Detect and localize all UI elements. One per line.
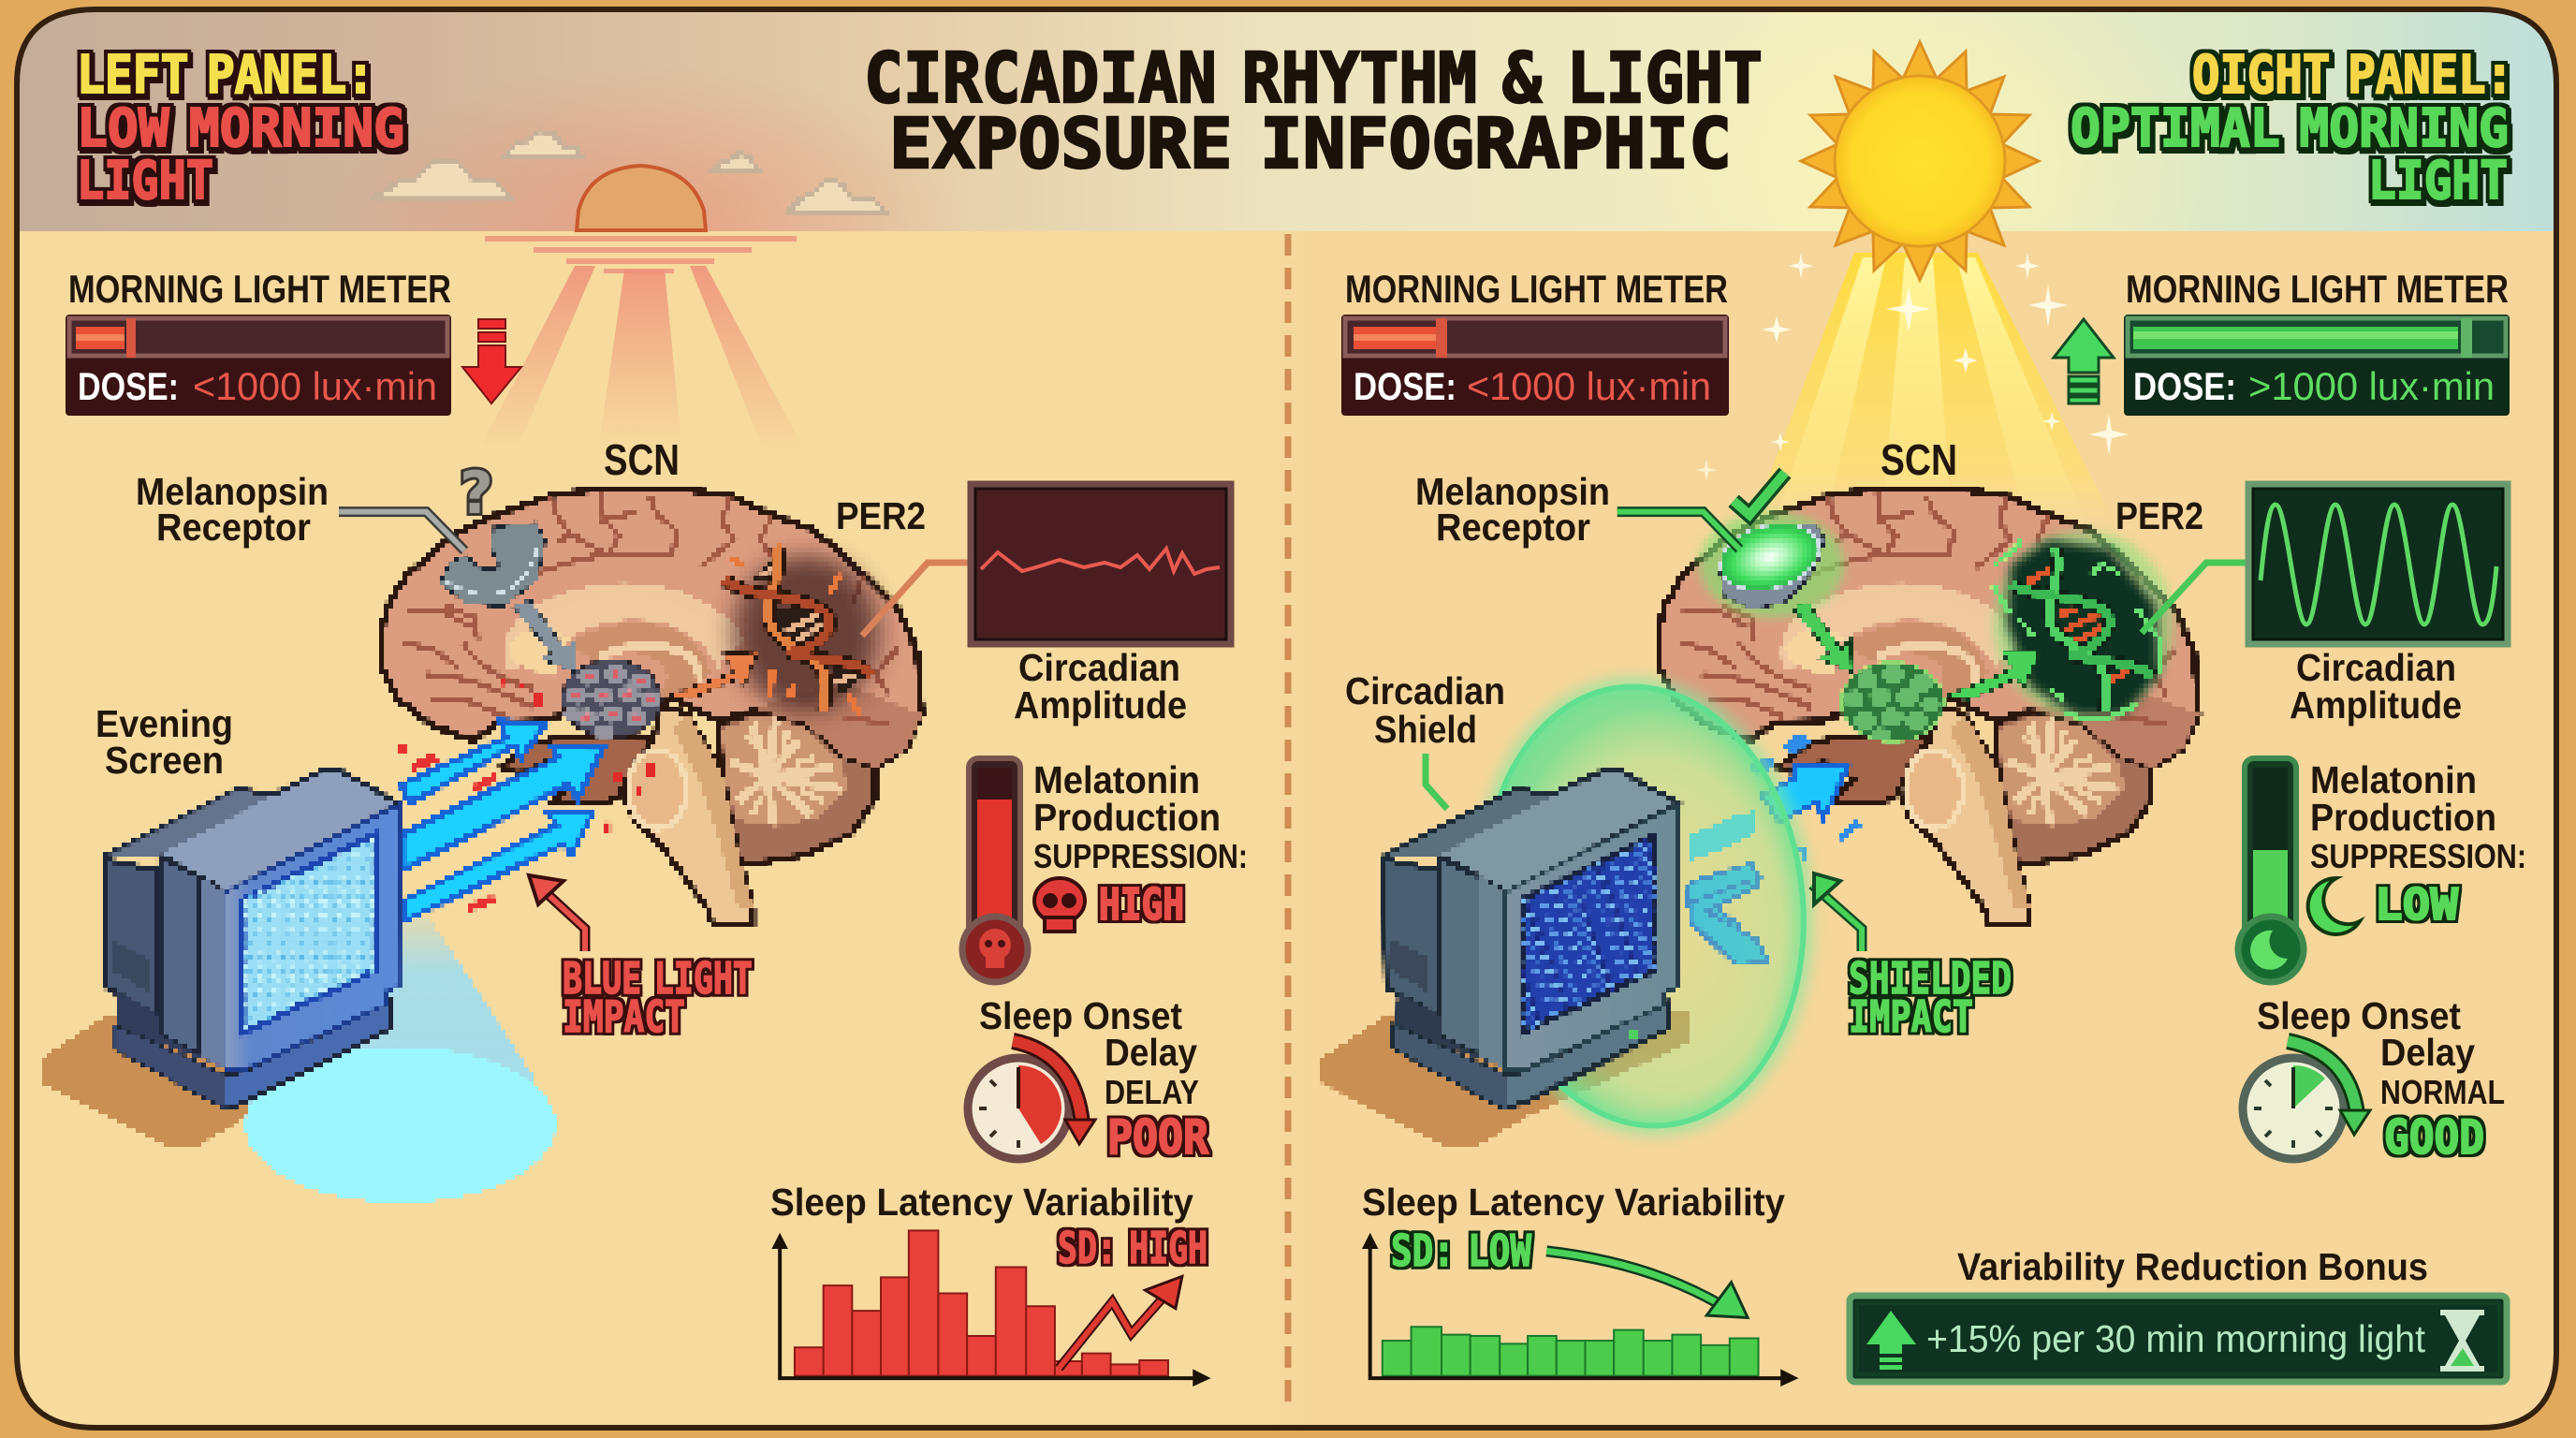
CRT monitor — [105, 770, 399, 1109]
falling trend arrow — [1546, 1251, 1748, 1317]
connector to amplitude scope right — [2142, 563, 2247, 633]
histogram right — [1362, 1233, 1798, 1387]
HIGH status: HIGH — [1099, 879, 1184, 930]
SCN label left: SCN — [604, 435, 680, 484]
axis arrowheads — [771, 1233, 1211, 1387]
circadian shield — [1462, 671, 1825, 1141]
shield pointer — [1426, 754, 1447, 809]
left light meter: DOSE: — [78, 364, 179, 408]
Circadian Amplitude label left — [1014, 646, 1187, 726]
shielded impact label — [1849, 953, 2012, 1042]
Sleep Latency Variability title right: Sleep Latency Variability — [1362, 1181, 1785, 1224]
PER2 label right: PER2 — [2115, 494, 2203, 537]
Melatonin Production text right: Production — [2310, 796, 2496, 839]
glowing PER2 zone — [1994, 531, 2173, 717]
shielded impact pointer — [1812, 873, 1862, 951]
red damage marks — [499, 679, 655, 832]
heading: right panel — [2071, 45, 2513, 212]
POOR status: POOR — [1107, 1110, 1209, 1165]
heading: left panel: LOW MORNING — [77, 98, 404, 159]
desk shadow — [41, 917, 556, 1202]
Variability Reduction Bonus title: Variability Reduction Bonus — [1957, 1245, 2428, 1288]
left meter label: MORNING LIGHT METER — [68, 267, 451, 311]
Melatonin Production text right: SUPPRESSION: — [2310, 837, 2526, 875]
PER2 DNA damaged — [724, 546, 871, 714]
melatonin thermometer left — [962, 758, 1028, 982]
panel divider — [1284, 234, 1292, 1404]
left light meter — [66, 315, 451, 416]
Melanopsin Receptor label left: Melanopsin — [136, 470, 329, 513]
monitor and shield, right — [1321, 671, 1862, 1147]
Sleep Onset Delay text left: Delay — [1105, 1031, 1197, 1074]
heading: right panel: LIGHT — [2368, 151, 2508, 212]
melanopsin receptor dish, broken — [441, 522, 546, 607]
SCN label right: SCN — [1881, 435, 1957, 484]
Melatonin Production text left: Production — [1033, 796, 1221, 839]
dark PER2 zone — [734, 555, 879, 712]
receptor glow — [1699, 512, 1845, 618]
Evening Screen label: Screen — [105, 739, 224, 782]
clouds — [377, 131, 886, 213]
PER2 label left: PER2 — [836, 494, 926, 537]
Melatonin Production text right: Melatonin — [2310, 758, 2477, 801]
blue light impact pointer — [529, 875, 585, 951]
right panel low light meter: <1000 lux·min — [1467, 364, 1711, 408]
Evening Screen label: Evening — [95, 702, 233, 745]
icon: low dose down arrow — [462, 319, 521, 404]
right panel low light meter — [1341, 315, 1729, 416]
light cone — [246, 917, 537, 1136]
circadian amplitude scope right — [2248, 484, 2508, 644]
heading: left panel: LEFT PANEL: — [77, 45, 374, 106]
blue light impact label: IMPACT — [563, 991, 685, 1042]
melanopsin pointer left — [339, 512, 464, 550]
SD HIGH status: SD: HIGH — [1058, 1223, 1208, 1273]
CRT monitor right — [1384, 770, 1678, 1109]
shielded impact label: IMPACT — [1849, 991, 1973, 1042]
Circadian Shield label: Circadian — [1345, 669, 1505, 712]
Melanopsin Receptor label right: Melanopsin — [1415, 470, 1610, 513]
melanopsin pointer right — [1617, 512, 1739, 550]
right light meter: >1000 lux·min — [2248, 364, 2495, 408]
blue light impact label — [563, 953, 753, 1042]
Circadian Shield label: Shield — [1374, 708, 1477, 751]
bright sun rays — [1750, 253, 2115, 524]
Circadian Amplitude label left: Circadian — [1018, 646, 1180, 689]
axis arrowheads — [1362, 1233, 1798, 1387]
orange signal arrow — [669, 652, 758, 698]
axes — [780, 1238, 1203, 1378]
Sleep Onset Delay text left: DELAY — [1105, 1073, 1199, 1111]
Evening Screen label — [95, 702, 233, 782]
red damage sparks — [400, 745, 497, 913]
icon: hourglass — [2440, 1310, 2484, 1372]
Melanopsin Receptor label left — [136, 470, 329, 549]
Melanopsin Receptor label right: Receptor — [1436, 506, 1590, 549]
bars — [795, 1230, 1168, 1376]
Circadian Amplitude label right: Circadian — [2296, 646, 2456, 689]
Circadian Amplitude label right: Amplitude — [2290, 683, 2462, 726]
Circadian Amplitude label left: Amplitude — [1014, 683, 1187, 726]
Sleep Onset Delay text right: Delay — [2380, 1031, 2475, 1074]
grey signal arrow — [513, 600, 576, 672]
green signal arrow up — [1948, 652, 2040, 700]
icon: skull — [1034, 878, 1085, 932]
title: EXPOSURE INFOGRAPHIC — [889, 104, 1732, 184]
right light meter: DOSE: — [2133, 364, 2236, 408]
Melatonin Production text left — [1033, 758, 1248, 875]
heading: left panel: LIGHT — [77, 151, 213, 212]
histogram left — [771, 1230, 1211, 1387]
Melatonin Production text left: SUPPRESSION: — [1033, 837, 1248, 875]
SCN cell cluster, healthy — [1840, 662, 1944, 741]
dim sunrise sun — [485, 166, 797, 273]
Sleep Onset Delay text right — [2257, 994, 2505, 1111]
sparkles — [1695, 253, 2129, 481]
Melatonin Production text right — [2310, 758, 2526, 875]
GOOD status: GOOD — [2384, 1110, 2484, 1165]
Melanopsin Receptor label left: Receptor — [156, 506, 311, 549]
weak morning rays — [480, 266, 805, 451]
Circadian Shield label — [1345, 669, 1505, 751]
PER2 DNA healthy — [1992, 540, 2161, 721]
SD LOW status: SD: LOW — [1391, 1225, 1531, 1276]
bright sun — [1801, 42, 2039, 280]
Sleep Latency Variability title left: Sleep Latency Variability — [770, 1181, 1193, 1224]
melanopsin receptor dish, activated — [1720, 524, 1824, 609]
Sleep Onset Delay text left — [979, 994, 1199, 1111]
melatonin thermometer right — [2238, 758, 2304, 982]
blue light rays — [402, 721, 602, 920]
Sleep Onset Delay text right: Sleep Onset — [2257, 994, 2461, 1037]
question mark icon: ? — [460, 459, 493, 527]
title — [864, 38, 1763, 184]
SCN cell cluster, stressed — [562, 660, 661, 740]
right panel low light meter: DOSE: — [1354, 364, 1456, 408]
heading: left panel — [77, 45, 404, 212]
icon: clock right — [2243, 1041, 2370, 1159]
bonus panel — [1850, 1296, 2507, 1382]
icon: clock left — [968, 1041, 1095, 1159]
blue light impact label: BLUE LIGHT — [563, 953, 753, 1004]
Melatonin Production text left: Melatonin — [1033, 758, 1200, 801]
brain: right — [1660, 490, 2199, 925]
Melanopsin Receptor label right — [1415, 470, 1610, 549]
blue light blocked rays — [1686, 733, 1862, 964]
icon: optimal dose up arrow — [2054, 319, 2114, 404]
circadian amplitude scope left — [971, 484, 1231, 644]
LOW status: LOW — [2375, 879, 2458, 930]
heading: right panel: OPTIMAL MORNING — [2071, 98, 2509, 159]
Sleep Onset Delay text left: Sleep Onset — [979, 994, 1182, 1037]
axes — [1370, 1238, 1789, 1378]
skull in bulb — [979, 929, 1011, 968]
bonus panel: +15% per 30 min morning light — [1926, 1317, 2426, 1360]
blue light arrows and monitor, left — [41, 721, 602, 1202]
left light meter: <1000 lux·min — [193, 364, 437, 408]
middle meter label: MORNING LIGHT METER — [1345, 267, 1728, 311]
shielded impact label: SHIELDED — [1849, 953, 2012, 1004]
title: CIRCADIAN RHYTHM & LIGHT — [864, 38, 1763, 119]
heading: right panel: OIGHT PANEL: — [2192, 45, 2513, 106]
right light meter — [2124, 315, 2510, 416]
icon: moon — [2308, 878, 2360, 934]
green signal arrow down — [1793, 602, 1852, 672]
shield glow — [1462, 671, 1825, 1141]
Sleep Onset Delay text right: NORMAL — [2380, 1073, 2505, 1111]
icon: up arrow — [1866, 1311, 1916, 1370]
brain: left — [383, 490, 922, 925]
desk shadow right — [1321, 1011, 1690, 1147]
rising trend arrow — [1059, 1276, 1182, 1368]
Circadian Amplitude label right — [2290, 646, 2462, 726]
moon in bulb — [2250, 931, 2288, 970]
bars — [1383, 1327, 1759, 1376]
connector to amplitude scope left — [862, 563, 969, 636]
icon: check mark — [1734, 473, 1785, 515]
